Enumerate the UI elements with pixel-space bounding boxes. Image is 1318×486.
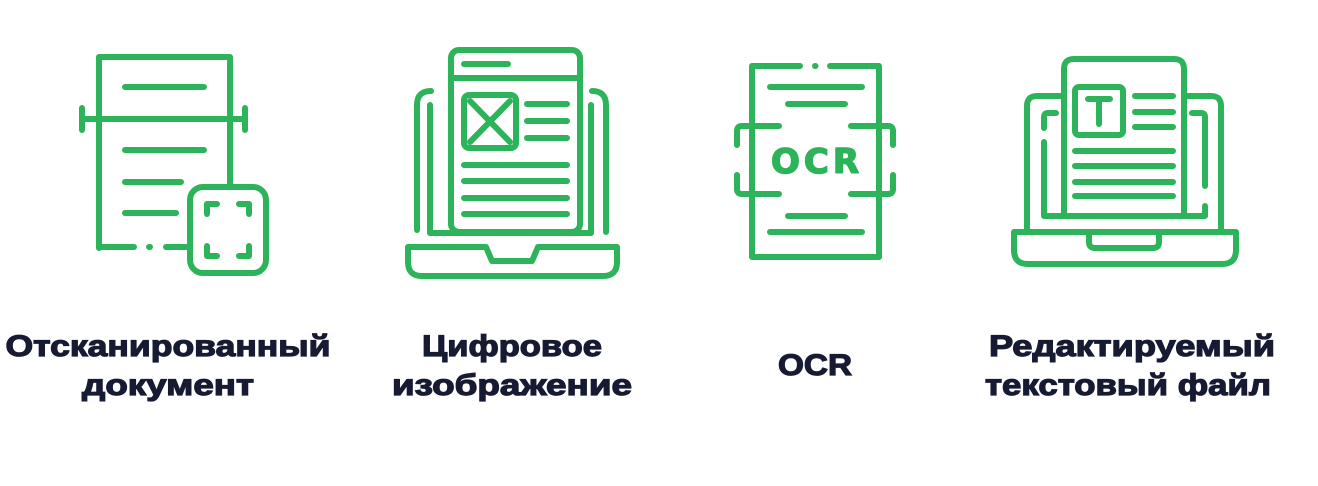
icon: OCR: OCR xyxy=(771,142,859,182)
icon: OCR xyxy=(737,66,893,257)
label: scanned document xyxy=(6,330,330,402)
label: editable text file: текстовый файл xyxy=(985,369,1271,402)
label: digital image: изображение xyxy=(392,369,632,402)
icon: scanned document xyxy=(82,57,266,273)
label: scanned document: документ xyxy=(82,369,254,402)
label: editable text file xyxy=(985,330,1275,402)
icon: editable text laptop xyxy=(1014,59,1236,264)
label: scanned document: Отсканированный xyxy=(6,330,330,363)
label: editable text file: Редактируемый xyxy=(989,330,1275,363)
icon: digital image laptop xyxy=(408,50,617,276)
label: OCR: OCR xyxy=(778,349,852,382)
label: digital image xyxy=(392,330,632,402)
label: digital image: Цифровое xyxy=(422,330,602,363)
